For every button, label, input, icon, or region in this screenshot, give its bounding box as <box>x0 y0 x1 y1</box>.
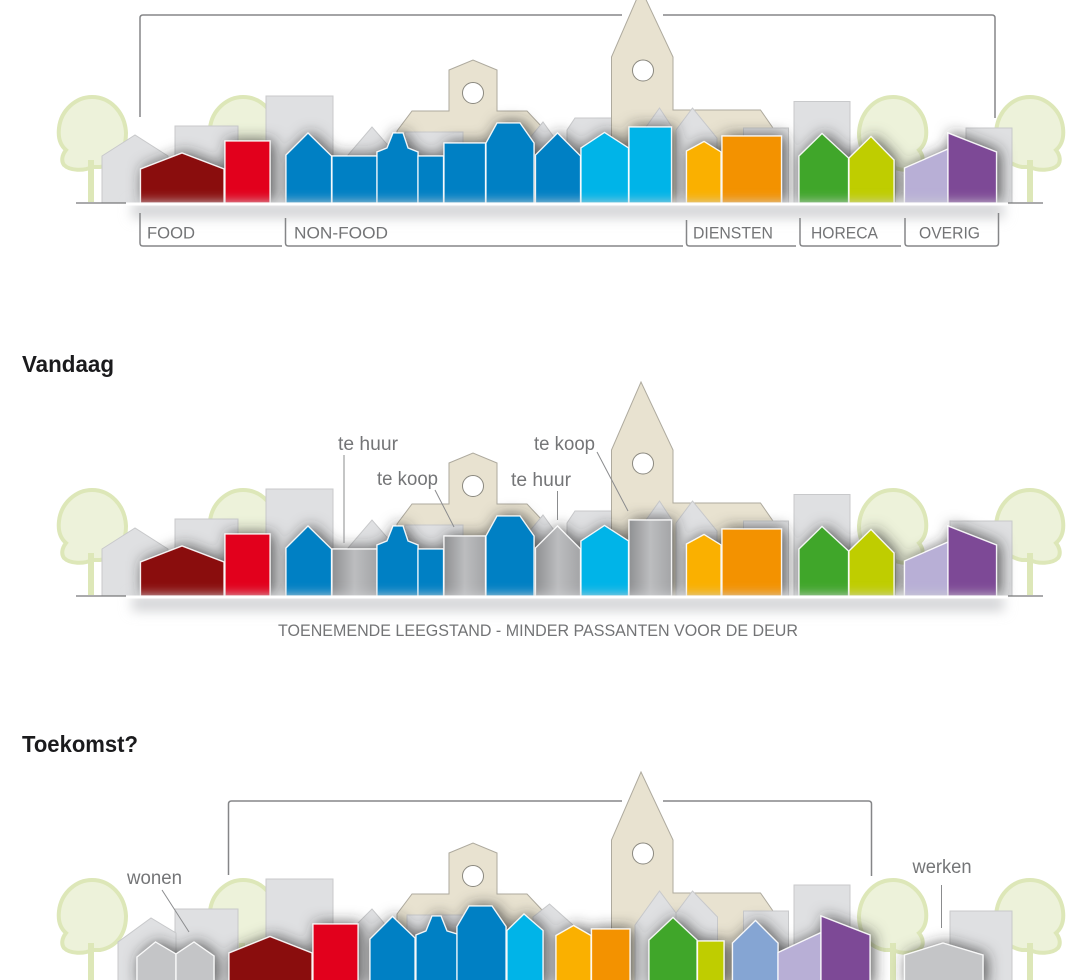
top bracket <box>228 801 872 876</box>
callouts: te huur and te koop: te huur <box>511 470 572 491</box>
callouts: wonen and werken <box>126 857 971 932</box>
heading: Vandaag: Vandaag <box>22 351 114 377</box>
shops with vacant grey units <box>140 516 996 596</box>
sector brackets and labels: OVERIG <box>919 224 980 242</box>
callouts: te huur and te koop: te huur <box>338 434 399 455</box>
caption: TOENEMENDE LEEGSTAND - MINDER PASSANTEN VOOR DE DEUR <box>278 621 798 640</box>
ground line with shadow <box>76 596 1043 611</box>
top bracket <box>140 15 995 118</box>
callouts: te huur and te koop: te koop <box>377 469 438 490</box>
backdrop: trees, grey buildings and churches <box>59 382 1063 596</box>
callouts: te huur and te koop: te koop <box>534 434 595 455</box>
backdrop: trees, grey buildings and churches <box>59 0 1063 203</box>
sector brackets and labels: FOOD <box>147 224 195 242</box>
sector brackets and labels <box>140 213 998 246</box>
sector brackets and labels: HORECA <box>811 224 879 242</box>
callouts: wonen and werken: werken <box>912 857 972 878</box>
coloured shops <box>140 123 996 203</box>
scene: overview by sector <box>59 0 1063 246</box>
backdrop: trees, grey buildings and churches <box>59 772 1063 980</box>
scene: toekomst <box>59 772 1063 980</box>
sector brackets and labels: NON-FOOD <box>294 224 388 242</box>
scene: vandaag <box>59 382 1063 611</box>
callouts: te huur and te koop <box>338 434 628 543</box>
heading: Toekomst?: Toekomst? <box>22 731 138 757</box>
shops with housing and offices <box>137 906 983 980</box>
callouts: wonen and werken: wonen <box>126 868 182 889</box>
sector brackets and labels: DIENSTEN <box>693 224 773 242</box>
ground line with shadow <box>76 202 1043 218</box>
